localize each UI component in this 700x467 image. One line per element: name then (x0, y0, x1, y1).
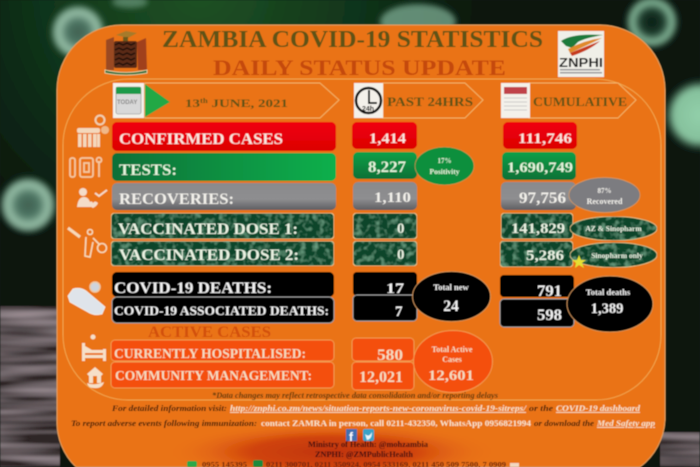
row: currently hospitalised (111, 340, 334, 362)
callout: recovered: 87% (598, 187, 612, 195)
value: deaths cumulative: 791 (537, 283, 562, 300)
value: confirmed cumulative (503, 122, 577, 149)
icon: hospital bed (82, 334, 106, 361)
value: recoveries past 24 hours (353, 182, 417, 210)
row: confirmed cases: CONFIRMED CASES (119, 131, 283, 148)
icon: ZNPHI logo: ZNPHI (559, 55, 603, 70)
row: recoveries (112, 183, 336, 210)
date header: TODAY (117, 100, 137, 106)
heading: active cases: ACTIVE CASES (148, 324, 271, 341)
value: recoveries past 24 hours: 1,110 (374, 190, 411, 206)
value: dose 1 cumulative: 141,829 (511, 221, 565, 237)
value: dose 2 cumulative (500, 241, 573, 267)
row: community management (111, 362, 334, 388)
value: confirmed cumulative: 111,746 (518, 131, 573, 147)
icon: home care (87, 367, 104, 388)
past 24 hours header: PAST 24HRS (387, 95, 473, 109)
value: deaths past 24 hours: 17 (386, 281, 405, 297)
row: tests: TESTS: (119, 162, 177, 179)
icon: vaccination (68, 228, 106, 257)
text: detailed information: For detailed information visit: (111, 403, 227, 413)
date header: JUNE, 2021 (208, 96, 288, 110)
row: confirmed cases (112, 122, 336, 151)
value: dose 1 past 24 hours: 0 (397, 221, 404, 237)
footnote: data changes: *Data changes may reflect retrospective data consolidation and/or reporting delays (212, 391, 498, 400)
icon: Zambia coat of arms (105, 31, 147, 75)
callout: AZ and Sinopharm: AZ & Sinopharm (585, 224, 642, 233)
text: detailed information: or the (529, 403, 553, 413)
value: associated deaths past 24 hours: 7 (395, 304, 403, 320)
value: dose 2 past 24 hours: 0 (397, 247, 404, 263)
row: covid-19 associated deaths: COVID-19 ASSOCIATED DEATHS: (114, 303, 329, 318)
text: adverse events: To report adverse events following immunization: (71, 418, 257, 428)
row: vaccinated dose 2 (111, 241, 334, 266)
callout: AZ and Sinopharm (570, 216, 657, 240)
value: recoveries cumulative: 97,756 (519, 190, 566, 207)
callout: total deaths: Total deaths (586, 287, 631, 297)
icon: facebook (346, 429, 357, 444)
row: vaccinated dose 1: VACCINATED DOSE 1: (118, 221, 298, 238)
callout: total deaths: 1,389 (591, 301, 623, 317)
icon: ZNPHI logo (558, 31, 604, 77)
callout: positivity (415, 147, 474, 185)
title: ZAMBIA COVID-19 STATISTICS (162, 26, 543, 53)
row: covid-19 associated deaths (112, 297, 334, 323)
text: adverse events (71, 418, 655, 428)
icon: coffin (68, 282, 105, 315)
callout: total new deaths: Total new (433, 282, 470, 292)
footer: helpline numbers (187, 460, 519, 467)
row: currently hospitalised: CURRENTLY HOSPITALISED: (114, 347, 306, 362)
value: community past 24 hours: 12,021 (359, 369, 403, 386)
row: tests (112, 153, 336, 181)
callout: total deaths (567, 276, 653, 332)
cumulative header: CUMULATIVE (533, 95, 627, 109)
date header (113, 83, 339, 118)
icon: twitter (363, 429, 374, 441)
callout: total active cases: Total Active (432, 345, 473, 354)
callout: positivity: 17% (438, 157, 452, 165)
cumulative header (501, 83, 636, 118)
value: tests past 24 hours: 8,227 (368, 159, 406, 176)
callout: total new deaths (412, 272, 490, 322)
value: deaths past 24 hours (353, 272, 417, 297)
value: dose 2 cumulative: 5,286 (526, 248, 565, 264)
text: adverse events: contact ZAMRA in person, call 0211-432350, WhatsApp 0956821994 (261, 418, 532, 428)
callout: recovered (569, 178, 640, 212)
icon: confirmed cases group (77, 116, 109, 147)
text: detailed information: http://znphi.co.zm/news/situation-reports-new-coronavirus-covid-19-sitreps/ (230, 403, 528, 413)
value: deaths cumulative (500, 275, 574, 300)
past 24 hours header (354, 83, 483, 118)
callout: total new deaths: 24 (443, 298, 459, 315)
callout: Sinopharm only (570, 242, 657, 268)
text: ZNPHI handle: ZNPHI: @ZMPublicHealth (315, 449, 413, 459)
value: confirmed past 24 hours (352, 122, 417, 149)
value: dose 1 past 24 hours (353, 213, 417, 239)
callout: total active cases (414, 330, 492, 392)
past 24 hours header: 24h (362, 106, 374, 113)
callout: total active cases: 12,601 (428, 368, 474, 384)
subtitle: DAILY STATUS UPDATE (213, 55, 506, 80)
callout: Sinopharm only: Sinopharm only (591, 251, 643, 260)
text: detailed information: COVID-19 dashboard (556, 403, 641, 413)
value: associated deaths cumulative (500, 299, 574, 327)
row: covid-19 deaths (112, 272, 334, 297)
icon: recoveries (77, 188, 107, 208)
value: hospitalised past 24 hours (352, 338, 414, 364)
value: recoveries cumulative (501, 182, 576, 210)
value: dose 1 cumulative (501, 213, 573, 239)
row: vaccinated dose 2: VACCINATED DOSE 2: (119, 247, 299, 264)
text: adverse events: or download the (534, 418, 594, 428)
value: tests past 24 hours (353, 152, 417, 179)
value: tests cumulative: 1,690,749 (507, 160, 573, 176)
icon: facebook: f (349, 430, 354, 444)
row: community management: COMMUNITY MANAGEMENT: (115, 369, 312, 384)
callout: positivity: Positivity (430, 167, 460, 176)
value: hospitalised past 24 hours: 580 (377, 347, 403, 364)
value: associated deaths past 24 hours (353, 295, 417, 321)
icon: test kit (70, 158, 102, 177)
date header: th (200, 97, 208, 105)
text: ministry of health handle: Ministry of Health: @mohzambia (308, 439, 429, 449)
callout: recovered: Recovered (587, 197, 623, 206)
value: confirmed past 24 hours: 1,414 (369, 131, 407, 147)
row: vaccinated dose 1 (111, 213, 334, 239)
value: tests cumulative (502, 152, 576, 180)
text: detailed information (111, 403, 641, 413)
date header: 13 (185, 96, 197, 110)
value: associated deaths cumulative: 598 (537, 307, 562, 324)
row: covid-19 deaths: COVID-19 DEATHS: (114, 280, 272, 297)
value: community past 24 hours (352, 362, 414, 390)
row: recoveries: RECOVERIES: (119, 191, 234, 208)
text: adverse events: Med Safety app (596, 418, 655, 428)
value: dose 2 past 24 hours (353, 241, 417, 266)
callout: total active cases: Cases (442, 355, 462, 364)
